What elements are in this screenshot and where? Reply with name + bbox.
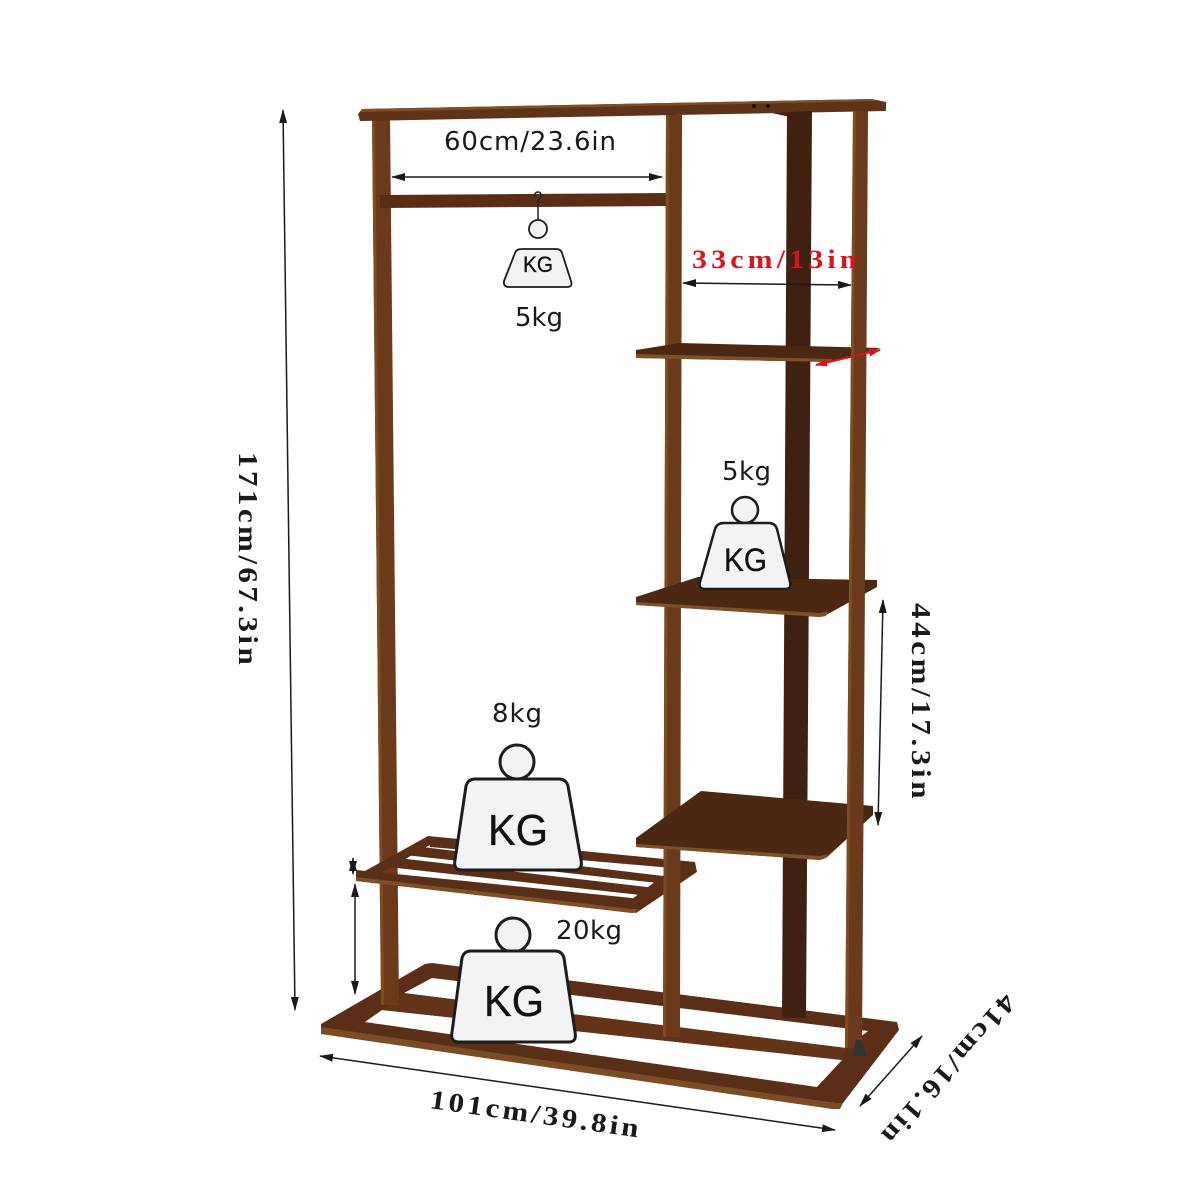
lower shelf — [636, 791, 873, 860]
shelf unit — [321, 99, 899, 1109]
top shelf — [636, 343, 881, 362]
dimension: depth 41cm: 41cm/16.1in — [875, 988, 1022, 1150]
weight: base 20kg: KG — [484, 977, 544, 1026]
label: 5kg hanging: 5kg — [515, 303, 563, 333]
right post — [845, 111, 868, 1048]
weight: shelf 5kg: KG — [724, 542, 767, 578]
dimension: height 171cm: 171cm/67.3in — [233, 452, 262, 665]
label: 8kg: 8kg — [492, 699, 542, 729]
weight: hanging 5kg: KG — [523, 252, 553, 277]
centre post — [663, 115, 682, 1037]
bracket — [852, 1040, 866, 1056]
weight: slatted shelf 8kg — [455, 745, 581, 870]
top board — [358, 99, 886, 121]
middle shelf — [636, 577, 877, 617]
dimension: width 101cm — [320, 1056, 835, 1144]
dimension: shelf gap 44cm — [878, 600, 935, 825]
hanging rail — [380, 193, 666, 208]
label: 20kg: 20kg — [556, 916, 622, 946]
left post — [372, 118, 399, 1005]
dark rear post — [782, 112, 812, 1018]
dimension: width 101cm: 101cm/39.8in — [428, 1085, 641, 1144]
weight: shelf 5kg — [700, 497, 790, 589]
slatted shelf — [356, 836, 697, 913]
dimension: shelf spacing 33cm: 33cm/13in — [692, 246, 857, 274]
red depth arrow on top shelf — [816, 350, 880, 365]
dimension: shelf gap 44cm: 44cm/17.3in — [906, 603, 935, 798]
weight: hanging 5kg — [504, 192, 572, 287]
dimension: rail width 60cm: 60cm/23.6in — [444, 127, 616, 157]
weight: slatted shelf 8kg: KG — [488, 806, 548, 855]
dimension: small shelf height — [353, 858, 355, 994]
base frame — [321, 963, 899, 1109]
label: 5kg shelf: 5kg — [722, 457, 771, 487]
weight: base 20kg — [452, 918, 575, 1042]
dimension: height 171cm — [233, 110, 295, 1010]
